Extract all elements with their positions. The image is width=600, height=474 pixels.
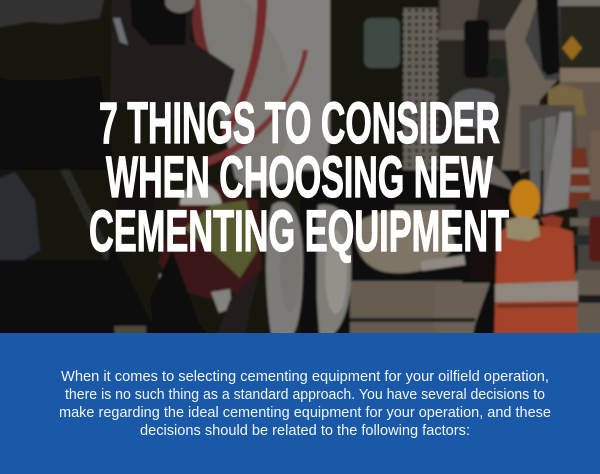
frame and mirrors: [438, 0, 528, 170]
construction barrel: [494, 226, 578, 340]
road sign: [562, 36, 582, 60]
lower left: [0, 260, 115, 340]
metal guards: [530, 118, 542, 215]
rear tires: [266, 202, 303, 340]
intro paragraph: When it comes to selecting cementing equipment for your oilfield operation,: [61, 369, 549, 385]
title: [89, 91, 509, 264]
fuel tank: [356, 208, 455, 273]
drum hub: [110, 0, 235, 125]
intro paragraph: make regarding the ideal cementing equipment for your operation, and these: [59, 405, 551, 421]
blue intro panel: [0, 333, 600, 474]
intro paragraph: there is no such thing as a standard approach. You have several decisions to: [65, 387, 545, 403]
background photo: cement truck at roadside: [0, 0, 600, 340]
dark chute: [150, 252, 207, 333]
warning light: [510, 180, 540, 220]
top left body panel: [0, 0, 105, 28]
perforated exhaust shield: [403, 8, 438, 170]
intro paragraph: [59, 369, 551, 439]
far background: [558, 0, 600, 6]
worker: [158, 183, 262, 300]
distant traffic cone: [568, 148, 592, 208]
lower chassis: [300, 170, 520, 340]
distant barrel: [589, 216, 600, 262]
mixer drum: [199, 0, 302, 192]
cab door and window: [329, 0, 339, 134]
tire upper: [536, 0, 560, 76]
intro paragraph: decisions should be related to the following factors:: [140, 423, 470, 439]
cab side: [500, 0, 562, 180]
road surface: [574, 269, 600, 333]
truck behind: [548, 84, 586, 115]
left frame: [0, 172, 40, 265]
